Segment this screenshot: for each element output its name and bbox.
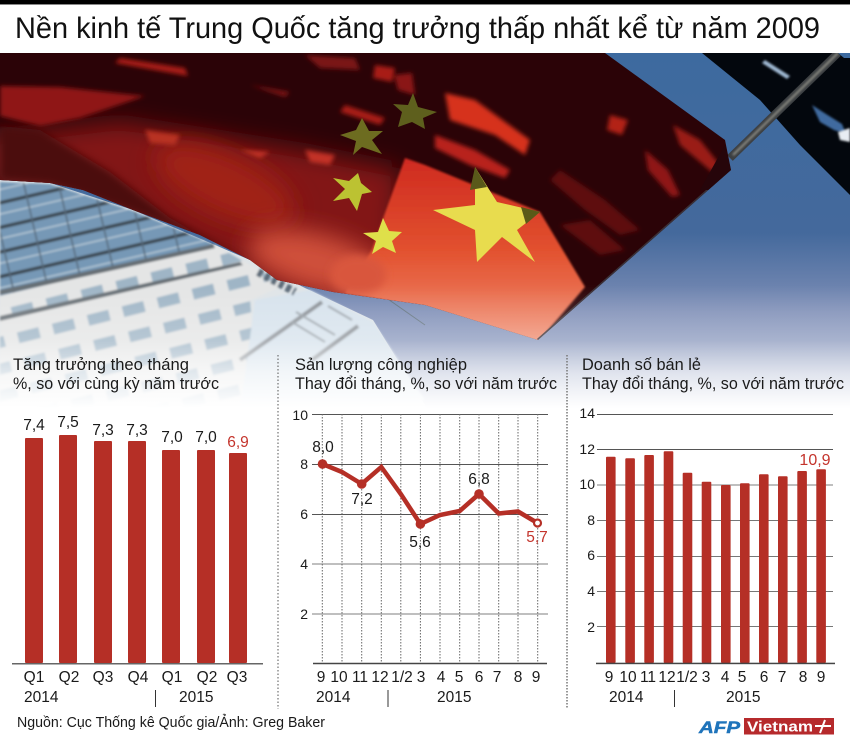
- x axis labels: retail sales: 5: [738, 669, 746, 686]
- building: [0, 180, 416, 394]
- image fade to white: [0, 292, 850, 413]
- sky: [0, 53, 850, 413]
- x axis labels: industrial output: 2014: [316, 689, 351, 706]
- x axis labels: industrial output: 4: [437, 669, 446, 686]
- logo: AFP Vietnam+: Vietnam: [747, 720, 813, 736]
- x axis labels: industrial output: 9: [532, 669, 540, 686]
- y axis labels: retail sales: 10: [579, 476, 595, 492]
- x axis labels: industrial output: 2015: [437, 689, 471, 706]
- value labels: quarterly growth: 6,9: [227, 434, 249, 451]
- y axis labels: retail sales: 4: [587, 583, 595, 599]
- x axis labels: industrial output: 3: [417, 669, 425, 686]
- axis labels: quarters: Q2: [59, 669, 79, 686]
- x axis labels: industrial output: 10: [330, 669, 348, 686]
- value label: retail sales: 10,9: [799, 452, 831, 469]
- heading: industrial output: [295, 356, 557, 393]
- bar chart: quarterly growth: [12, 435, 263, 664]
- black structure top right: [702, 53, 850, 195]
- photo: Chinese flag over building: [0, 53, 850, 415]
- flag: [0, 53, 740, 353]
- axis labels: quarters: Q3: [93, 669, 113, 686]
- axis labels: quarters: 2014: [24, 689, 59, 706]
- x axis labels: industrial output: 1/2: [391, 669, 413, 686]
- x axis labels: retail sales: 6: [760, 669, 768, 686]
- y axis labels: industrial output: 4: [300, 556, 308, 572]
- x axis labels: industrial output: 11: [352, 669, 368, 686]
- x axis labels: industrial output: 9: [317, 669, 325, 686]
- x axis labels: retail sales: 12: [658, 669, 676, 686]
- axis labels: quarters: 2015: [179, 689, 213, 706]
- y axis labels: industrial output: 10: [292, 407, 308, 423]
- x axis labels: industrial output: 12: [371, 669, 389, 686]
- panel: retail sales: [579, 356, 844, 707]
- top black bar: [0, 0, 850, 5]
- flag mid section: [0, 122, 430, 330]
- flag upper left lit fold: [0, 86, 145, 126]
- value labels: quarterly growth: [23, 414, 249, 451]
- x axis labels: retail sales: 2015: [726, 689, 760, 706]
- heading: industrial output: Sản lượng công nghiệp: [295, 356, 467, 374]
- flag bright panel: [345, 158, 585, 342]
- y axis labels: retail sales: 12: [579, 441, 595, 457]
- value labels: quarterly growth: 7,4: [23, 417, 45, 434]
- y axis labels: retail sales: 8: [587, 512, 595, 528]
- axis labels: quarters: Q4: [128, 669, 149, 686]
- heading: retail sales: Thay đổi tháng, %, so với năm trước: [582, 375, 844, 393]
- x axis labels: retail sales: 1/2: [676, 669, 698, 686]
- line: industrial output series: [318, 459, 541, 529]
- y axis labels: industrial output: 8: [300, 456, 308, 472]
- heading: quarterly growth: %, so với cùng kỳ năm trước: [13, 375, 219, 393]
- heading: quarterly growth: [13, 356, 219, 393]
- y axis labels: industrial output: 2: [300, 606, 308, 622]
- stars: [333, 93, 540, 262]
- value labels: industrial output: 6,8: [468, 471, 490, 488]
- title: Nền kinh tế Trung Quốc tăng trưởng thấp nhất kể từ năm 2009: [15, 12, 820, 45]
- x axis labels: industrial output: 7: [493, 669, 501, 686]
- x axis labels: retail sales: 7: [778, 669, 786, 686]
- x axis labels: retail sales: 10: [619, 669, 637, 686]
- x axis labels: retail sales: 3: [702, 669, 710, 686]
- panel: quarterly growth: [12, 356, 263, 707]
- wire: [388, 300, 426, 326]
- y axis labels: retail sales: [579, 405, 595, 635]
- y axis labels: retail sales: 2: [587, 619, 595, 635]
- y axis labels: industrial output: 6: [300, 506, 308, 522]
- axis labels: quarters: Q3: [227, 669, 247, 686]
- value labels: industrial output: 5,7: [526, 529, 548, 546]
- axis labels: quarters: Q1: [24, 669, 44, 686]
- value labels: industrial output: 7,2: [351, 491, 373, 508]
- panel: industrial output: [292, 356, 557, 707]
- heading: quarterly growth: Tăng trưởng theo tháng: [13, 356, 189, 374]
- flagpole: [730, 53, 838, 158]
- x axis labels: retail sales: 9: [605, 669, 613, 686]
- dotted separators: [278, 355, 567, 709]
- x axis labels: retail sales: [605, 669, 825, 707]
- x axis labels: retail sales: 4: [721, 669, 730, 686]
- value labels: quarterly growth: 7,3: [92, 422, 114, 439]
- value labels: quarterly growth: 7,5: [57, 414, 79, 431]
- flag hem: [538, 170, 731, 340]
- logo: AFP Vietnam+: AFP: [698, 718, 741, 737]
- y axis labels: retail sales: 6: [587, 547, 595, 563]
- x axis labels: retail sales: 11: [640, 669, 656, 686]
- x axis labels: industrial output: 5: [455, 669, 463, 686]
- line chart grid: [312, 414, 548, 664]
- logo: AFP Vietnam+: [698, 718, 834, 737]
- heading: industrial output: Thay đổi tháng, %, so với năm trước: [295, 375, 557, 393]
- heading: retail sales: Doanh số bán lẻ: [582, 356, 701, 374]
- value labels: quarterly growth: 7,3: [126, 422, 148, 439]
- value labels: industrial output: 5,6: [409, 534, 431, 551]
- x axis labels: retail sales: 2014: [609, 689, 644, 706]
- x axis labels: retail sales: 9: [817, 669, 825, 686]
- x axis labels: industrial output: 8: [514, 669, 522, 686]
- value labels: quarterly growth: 7,0: [195, 429, 217, 446]
- value labels: industrial output: [312, 439, 548, 551]
- y axis labels: industrial output: [292, 407, 308, 622]
- value labels: quarterly growth: 7,0: [161, 429, 183, 446]
- window shadow patches: [115, 55, 720, 255]
- value labels: industrial output: 8,0: [312, 439, 334, 456]
- axis labels: quarters: Q2: [197, 669, 217, 686]
- axis labels: quarters: Q1: [162, 669, 182, 686]
- axis labels: quarters: [24, 669, 247, 707]
- x axis labels: retail sales: 8: [799, 669, 807, 686]
- x axis labels: industrial output: 6: [475, 669, 483, 686]
- bar chart grid: [597, 414, 833, 626]
- y axis labels: retail sales: 14: [579, 405, 595, 421]
- source note: Nguồn: Cục Thống kê Quốc gia/Ảnh: Greg Baker: [17, 714, 325, 731]
- x axis labels: industrial output: [316, 669, 540, 707]
- bar chart: retail sales: [596, 451, 835, 664]
- heading: retail sales: [582, 356, 844, 393]
